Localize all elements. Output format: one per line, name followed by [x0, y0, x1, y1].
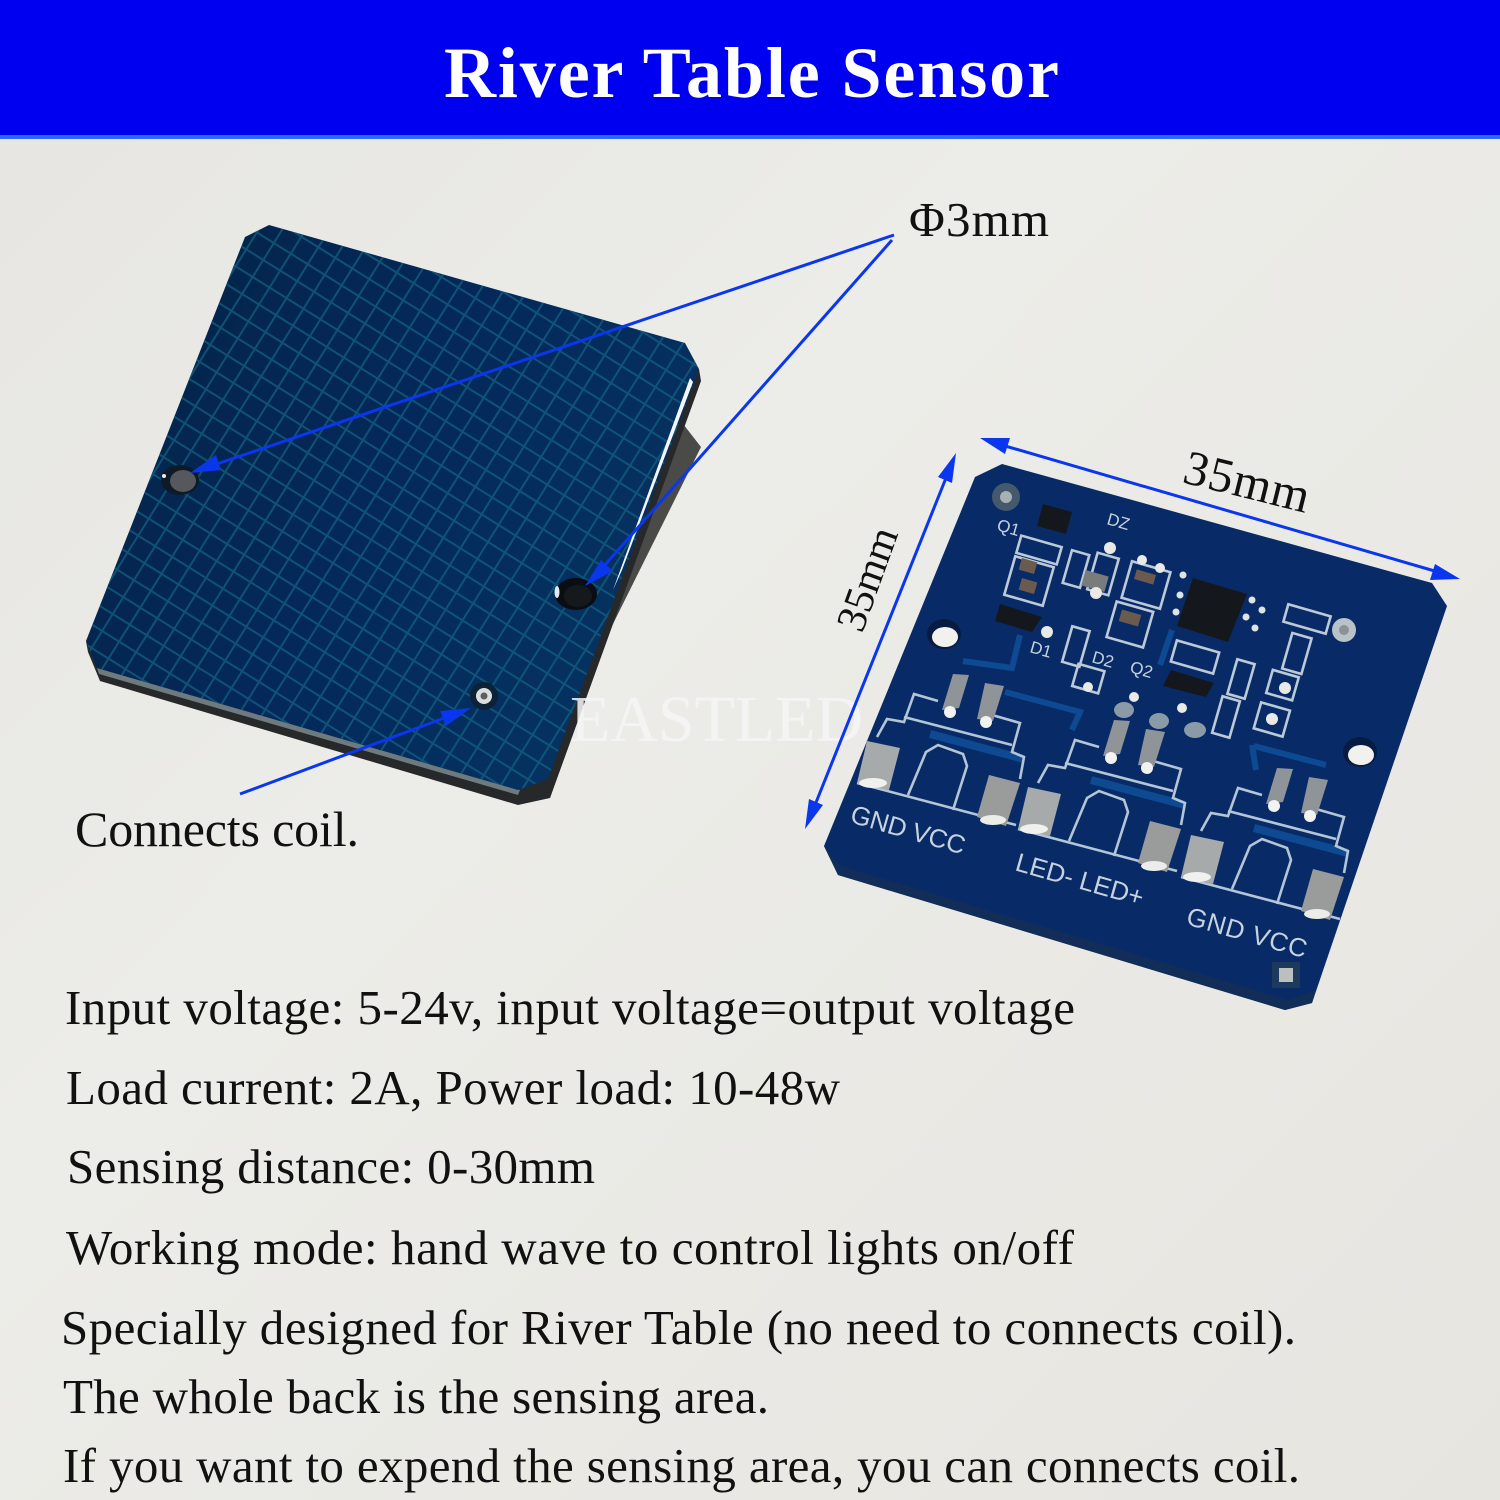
- silkscreen labels: LED- LED+: [1012, 847, 1148, 912]
- dark traces: [963, 630, 1326, 770]
- specification text: [61, 980, 1300, 1493]
- specification text: Specially designed for River Table (no need to connects coil).: [61, 1300, 1296, 1355]
- black semiconductor chips: [995, 504, 1247, 697]
- width dimension arrow: [980, 438, 1460, 580]
- coil solder pad: [470, 682, 498, 710]
- output channel 1: [857, 674, 1024, 826]
- silkscreen labels: GND VCC: [847, 799, 969, 860]
- output channel 2: [1018, 720, 1185, 872]
- silkscreen labels: D2: [1090, 648, 1116, 672]
- mounting hole right: [554, 578, 597, 610]
- specification text: Input voltage: 5-24v, input voltage=output voltage: [65, 980, 1075, 1035]
- arrows to 3mm holes: [190, 235, 894, 586]
- header banner: [0, 0, 1500, 139]
- specification text: Working mode: hand wave to control lights on/off: [66, 1220, 1075, 1275]
- label: connects coil: Connects coil.: [75, 801, 359, 857]
- component footprints: [1004, 536, 1331, 738]
- arrow to coil pad: [240, 708, 471, 794]
- specification text: The whole back is the sensing area.: [63, 1369, 769, 1424]
- silkscreen labels: DZ: [1105, 510, 1132, 534]
- title: River Table Sensor: [444, 33, 1059, 113]
- height dimension arrow: [805, 453, 956, 829]
- specification text: Load current: 2A, Power load: 10-48w: [66, 1060, 841, 1115]
- specification text: Sensing distance: 0-30mm: [67, 1139, 595, 1194]
- label: 35mm width: 35mm: [1178, 439, 1316, 524]
- silkscreen labels: GND VCC: [1183, 901, 1311, 964]
- watermark: EASTLED: [570, 683, 863, 756]
- mounting holes and vias: [927, 483, 1377, 988]
- right sensor board, component side: [824, 464, 1447, 1010]
- silkscreen labels: D1: [1028, 638, 1054, 662]
- specification text: If you want to expend the sensing area, you can connects coil.: [63, 1438, 1300, 1493]
- left sensor board, back side: [86, 225, 701, 805]
- label: hole diameter: Φ3mm: [909, 192, 1049, 247]
- mounting hole left: [161, 465, 199, 495]
- label: 35mm height: 35mm: [828, 521, 908, 637]
- capacitors and solder joints: [1019, 542, 1291, 725]
- silkscreen labels: Q2: [1128, 658, 1155, 682]
- silkscreen labels: Q1: [995, 516, 1022, 540]
- silkscreen labels: [847, 510, 1311, 964]
- output channel 3: [1181, 768, 1348, 920]
